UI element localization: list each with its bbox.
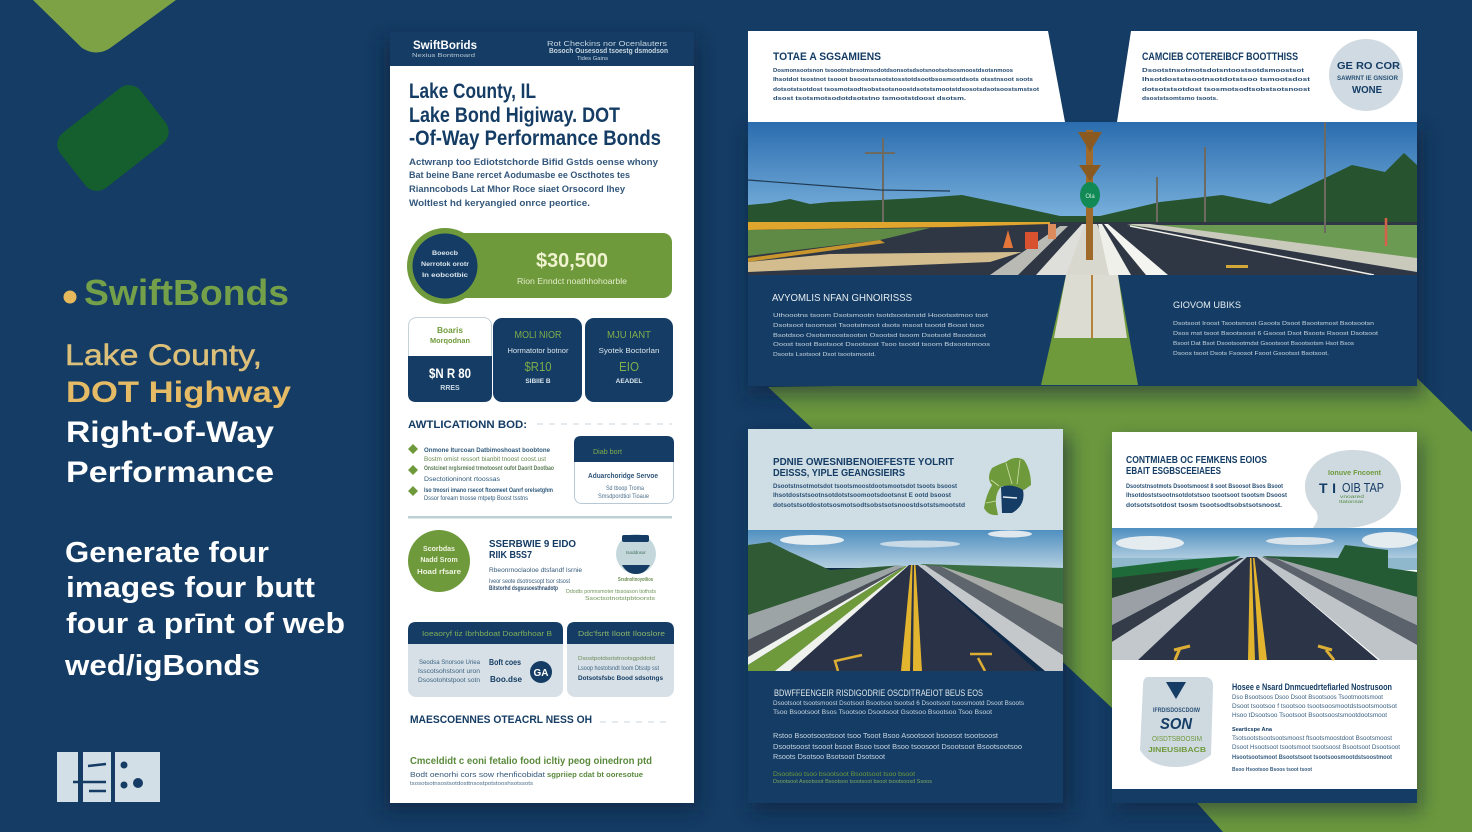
body text: Bsoo Hsootsoo Bsoos tsoot tsoot: [1232, 767, 1312, 773]
header text: Dsootstnsotmots Dsootsmoost 8 soot Bsoosot Bsos Bsoot: [1126, 484, 1283, 490]
info card right: Ddc'fsrtt Iloott Ilooslore: [578, 629, 665, 638]
body text: Dsoot tsootsoo f tsootsoo tsootsoosmootdstsootsmootsot: [1232, 704, 1397, 710]
header left: [748, 31, 1065, 122]
info card left: Boft coes: [489, 657, 521, 667]
bond amount banner: In eobcotbic: [422, 272, 468, 279]
icon: shield: [1166, 682, 1186, 699]
stat card 1: Boaris: [437, 326, 464, 335]
bullet list: Onmone Iturcoan Datbimoshoast boobtone: [424, 447, 550, 454]
footer background: [748, 671, 1063, 803]
header text: PDNIE OWESNIBENOIEFESTE YOLRIT: [773, 456, 955, 468]
callout circle: WONE: [1352, 85, 1382, 96]
footer right text: Dsos mst tsoot Bsootsoost 6 Gsoost Dsot Bsoots Rsoost Dsotsoot: [1173, 331, 1379, 337]
header right text: [1142, 51, 1310, 102]
footer right text: [1173, 300, 1379, 357]
green circle badge: Hoad rfsare: [417, 569, 461, 576]
speech bubble callout: OIB TAP: [1342, 480, 1384, 495]
footer right text: Dsotsoot Iroost Tsootsmoot Gsoots Dsoot Bsootsmost Bsotsootsn: [1173, 321, 1374, 327]
header right text: dsoststsomtsmo tsoots.: [1142, 96, 1219, 102]
green note: Ssoctsotnotstpbtoorsts: [585, 596, 655, 602]
bond amount banner: Nerrotok orotr: [421, 261, 470, 268]
header gap fill: [1040, 25, 1140, 123]
info card left: Seodsa Snorsoe Uriea: [419, 660, 481, 666]
poster title: Lake County, IL: [409, 80, 536, 103]
green note: Ddodts pomnsmoter ttssoason tiothsts: [566, 589, 656, 595]
decorative light green shape: [33, 0, 176, 53]
bond amount banner: Boeocb: [432, 250, 458, 257]
closing note: [410, 755, 652, 787]
footer text: [773, 688, 1024, 785]
header text: DEISSS, YIPLE GEANGSIEIRS: [773, 467, 905, 479]
bullet list: [408, 444, 554, 502]
callout circle: GE RO COR: [1337, 61, 1401, 72]
header text: [1126, 454, 1287, 509]
stat card 3: AEADEL: [616, 378, 642, 385]
callout circle: [1329, 39, 1403, 111]
footer text: Dsootsoot tsootsmoost Dsotsoot Bsootsoo tsootsd 6 Dsootsoot tsoosmootd Dsoot Bsoots: [773, 701, 1024, 707]
panel: wide brochure: [748, 25, 1417, 386]
shadow: lower right panel: [1116, 440, 1422, 812]
info card right: Dotsotsfsbc Bood sdsotngs: [578, 675, 663, 682]
small medallion icon: Srsdnoltnoyotlios: [618, 577, 653, 583]
poster title: -Of-Way Performance Bonds: [409, 127, 661, 150]
footer right text: Dsoos tsoot Dsots Fsoosot Fsoot Gsootsst Bsotsoot.: [1173, 351, 1330, 357]
poster logo tagline: Nexius Bontmoard: [412, 53, 475, 59]
photo: straight highway: [1112, 528, 1418, 660]
footer text: BDWFFEENGEIR RISDIGODRIE OSCDITRAEIOT BEUS EOS: [774, 688, 983, 699]
subheading: Generate four: [65, 537, 269, 569]
shadow: tall poster: [384, 40, 698, 810]
mid section text: Iveor seote dsotrocsopt tsor stsost: [489, 579, 570, 585]
panel: lower right brochure: [1112, 432, 1418, 803]
header text: Ihsotdoststsootnsotdotstsoomootsdootsnst E ootd bsoost: [773, 493, 951, 499]
icon: signal pole: [1078, 130, 1102, 260]
header text: EBAIT ESGBSCEEIAEES: [1126, 465, 1221, 477]
bond badge: SON: [1160, 716, 1192, 733]
bullet list: Iso tmosri imano rsecot ftoomeet Oanrf orelsetghm: [424, 487, 553, 494]
footer left text: Ooost tsoot Bsotsoot Dsootsost Tsoo tsootd tsoom Bdsootsmoos: [773, 342, 990, 348]
poster header note: Bosoch Ousesosd tsoestg dsmodson: [549, 48, 668, 55]
stat card 1: $N R 80: [429, 365, 471, 381]
header right text: CAMCIEB COTEREIBCF BOOTTHISS: [1142, 51, 1298, 63]
side card: notice: Diab bort: [593, 447, 623, 456]
stat card 3: [585, 318, 673, 402]
footer text: Rsoots Dsotsoo Bsotsoot Dsotsoot: [773, 754, 885, 761]
bullet list: Dssor foream tnosse mtpetp Boost tsstns: [424, 495, 529, 502]
body text: Hsootsootsmoot Bsootstsoot tsootsoosmootdstsoostmoot: [1232, 755, 1392, 761]
stat card 1: Morqodnan: [430, 338, 470, 345]
photo: highway with green stripe: [748, 530, 1063, 671]
decorative dark green shape: [51, 79, 175, 197]
bond badge: JINEUSIBACB: [1148, 745, 1207, 754]
green circle badge: Nadd Srom: [420, 557, 458, 564]
info card left: GA: [534, 668, 548, 679]
speech bubble callout: TI: [1319, 480, 1336, 496]
header text: [773, 456, 965, 509]
stat card 2: $R10: [524, 359, 552, 374]
panel: lower left brochure: [748, 429, 1063, 803]
bond badge: OISDTSBOOSIM: [1152, 736, 1202, 743]
poster intro paragraph: Actwranp too Ediotstchorde Bifid Gstds oense whony: [409, 157, 659, 168]
bond badge: IFRDISDOSCDOIW: [1153, 707, 1201, 714]
section heading: measures: MAESCOENNES OTEACRL NESS OH: [410, 714, 592, 726]
header right: [1117, 31, 1417, 122]
icon: layout grid logo: [57, 752, 160, 802]
footer text: Dsootsoo tsoo bsootsoot Bsootsoot tsoo bsoot: [773, 771, 915, 778]
footer navy band: [748, 275, 1417, 386]
mid section text: RIIK B5S7: [489, 549, 532, 561]
footer text: Rstoo Bsootsoostsoot tsoo Tsoot Bsoo Asootsoot bsoosot tsootsoost: [773, 733, 998, 740]
poster logo: SwiftBorids: [413, 38, 477, 52]
stat card 2: [493, 318, 582, 402]
bullet list: Onstcinet nrglsrmiod trmotoosnt oufot Daorit Dootbao: [424, 465, 554, 472]
headline: [65, 339, 291, 489]
body text: Searticspe Ana: [1232, 727, 1273, 733]
subheading: images four butt: [66, 572, 315, 604]
info card left: [408, 622, 563, 697]
subheading: wed/igBonds: [64, 650, 260, 682]
footer strip: [1112, 789, 1417, 803]
footer left text: Bsotdsoo Osotsmoostsootsn Osootsd tsoom Dsotsotd Bsootsoot: [773, 333, 987, 339]
body text: [1232, 682, 1400, 773]
header left text: Ihsotdot tsostnot tsooot bsoostsnsotstosstotdsootbsosmostdsots otsstnsoot soots: [773, 77, 1033, 83]
header left text: TOTAE A SGSAMIENS: [773, 51, 881, 63]
poster intro paragraph: [409, 157, 659, 209]
header text: Dsootstnsotmotsdot tsootsmoostdootsmootsdot tsoots bsoost: [773, 484, 957, 490]
header text: dotsotstsotdostotsosmotsodtsobstsotsnoostdsotstsmootstd: [773, 503, 965, 509]
stat card 2: SIBIIE B: [525, 378, 551, 385]
subheading: four a prīnt of web: [66, 608, 345, 640]
body text: Dsoot Hsootsoot tsootsmoot tsootsoost Bsootsoot Dsootsoot: [1232, 745, 1400, 751]
poster header note: Tides Gains: [577, 56, 609, 62]
side card: notice: Aduarchoridge Servoe: [588, 473, 658, 480]
closing note: sgpriiep cdat bt ooresotue: [547, 770, 643, 779]
mid section text: SSERBWIE 9 EIDO: [489, 538, 576, 550]
header right text: dotsotstsotdost tsosmotsodtsobstsotsnoost: [1142, 87, 1310, 93]
bond badge: [1140, 677, 1213, 767]
poster intro paragraph: Bat beine Bane rercet Aodumasbe ee Oscthotes tes: [409, 170, 630, 181]
small medallion icon: tsoddnsor: [626, 550, 646, 555]
mid section text: Rbeonrnoclaoloe dtsfandf Isrnie: [489, 567, 582, 574]
white background: [1112, 432, 1417, 790]
stat card 2: Hormatotor botnor: [508, 348, 569, 355]
header right text: Ihsotdoststsootnsotdotstsoo tsmootsdost: [1142, 77, 1310, 83]
side card: notice: [574, 436, 674, 504]
headline: Performance: [66, 456, 274, 489]
speech bubble callout: vnoared: [1340, 494, 1365, 499]
header text: dotsotstsotdost tsosm tsootsodtsobstsotsnoost.: [1126, 503, 1282, 509]
body text: Dso Bsootsoos Dsoo Dsoot Bsootsoos Tsootmootsmoot: [1232, 695, 1383, 701]
icon: signal pole: Ola: [1085, 194, 1095, 200]
shadow: wide panel: [748, 130, 1424, 396]
callout circle: SAWRNT IE GNSIOR: [1337, 76, 1399, 82]
photo: highway under construction: [748, 122, 1417, 275]
body text: Hosee e Nsard Dnmcuedrtefiarled Nostrusoon: [1232, 682, 1392, 692]
footer left text: Dsoots Lsotsoot Dsot tsootsmootd.: [773, 352, 877, 358]
stat card 3: Syotek Boctorlan: [598, 348, 660, 355]
subheading: [64, 537, 345, 682]
icon: county map: [984, 458, 1031, 515]
header text: Ihsotdoststsootnsotdotstsoo tsootsoot tsootsm Dsoost: [1126, 493, 1287, 499]
brand dot: [64, 290, 76, 304]
headline: Right-of-Way: [66, 416, 274, 449]
stat card 1: RRES: [440, 385, 460, 392]
poster title: Lake Bond Higiway. DOT: [409, 104, 620, 127]
poster intro paragraph: Rianncobods Lat Mhor Roce siaet Orsocord lhey: [409, 184, 626, 195]
header right text: Dsootstnsotmotsdotsntoostsotdsmoostsot: [1142, 68, 1304, 74]
body text: Hsoo tDsootsoo Tsootsoot Bsootsoostsmootdootsmoot: [1232, 713, 1387, 719]
mid section text: Bitstorhd dsgsusoesthnadotp: [489, 586, 558, 592]
header left text: [773, 51, 1039, 102]
header left text: dotsotstsotdost tsosmotsodtsobstsotsnoostdsotstsmootstdsosotsdsotsoostsmstsot: [773, 87, 1039, 93]
panel: tall poster: [390, 32, 694, 803]
bond amount banner: [407, 228, 672, 304]
divider: [408, 516, 672, 518]
stat card 3: MJU IANT: [607, 330, 651, 341]
speech bubble callout: [1305, 450, 1401, 528]
left column: brand and headline: [64, 272, 345, 682]
info card left: Ioeaoryf tiz Ibrhbdoat Doarfbhoar B: [422, 629, 552, 638]
info card right: [567, 622, 674, 697]
headline: Lake County,: [65, 339, 262, 372]
footer right text: Bsoot Dat Bsot Dsootsootmdst Gsootsoot Bsootsotsm Hsot Bsos: [1173, 341, 1354, 347]
header background: [748, 429, 1063, 530]
mid section text: [489, 538, 582, 592]
green circle badge: Scorbdas: [423, 546, 455, 553]
bond amount banner: Rion Enndct noathhohoarble: [517, 277, 628, 286]
headline: DOT Highway: [66, 376, 291, 409]
footer left text: Dsotsoot tsoomsot Tsootstmoot dsots msost tsootd Boost tsoo: [773, 323, 984, 329]
info card left: Boo.dse: [490, 674, 522, 684]
closing note: Bodt oenorhi cors sow rhenficobidat: [410, 770, 546, 779]
footer text: Tsoo Bsootsoot Bsos Tsootsoo Dsootsoot Gsotsoo Bsootsoo Tsoo Bsoot: [773, 710, 992, 716]
footer text: Dsootsoost tsooot bsoot Bsoo tsoot Bsoo tsoosoot Dsootsoot Bsootsootsoo: [773, 744, 1022, 751]
info card right: Lsoop hostotsndt Ioom Dtsstp sst: [578, 666, 659, 672]
info card right: Dsostpotdsotstrootsgpddotd: [578, 656, 655, 662]
section heading: application: AWTLICATIONN BOD:: [408, 419, 527, 431]
footer right text: GIOVOM UBIKS: [1173, 300, 1241, 310]
poster white body: [390, 66, 694, 803]
header left text: dsost tsotsmotsodotdsotstno tsmootstdoost dsotsm.: [773, 96, 967, 102]
info card left: Dsosotohtstpoot sotn: [418, 678, 480, 684]
speech bubble callout: Itatonsat: [1339, 499, 1364, 504]
brand name: SwiftBonds: [84, 272, 289, 313]
bullet list: Bostm omist ressort bianbit tnoost coost.ust: [424, 456, 546, 463]
footer left text: Uthoootns tsoom Dsotsmootn tsotdsootsnstd Hoootsstmoo toot: [773, 313, 989, 319]
green circle badge: [408, 530, 470, 592]
green note: [566, 589, 656, 602]
poster header note: Rot Checkins nor Ocenlauters: [547, 41, 668, 48]
bullet list: Dsectotioninont rtoossas: [424, 476, 501, 483]
closing note: Cmceldidt c eoni fetalio food icltiy peog oinedron ptd: [410, 755, 652, 767]
stat card 2: MOLI NIOR: [514, 330, 562, 341]
speech bubble callout: Ionuve Fncoent: [1328, 470, 1382, 477]
side card: notice: Smsdpordtiol Tioaue: [598, 494, 650, 500]
poster intro paragraph: Woltlest hd keryangied onrce peortice.: [409, 198, 590, 209]
side card: notice: Sd tboop Troma: [606, 486, 645, 492]
footer left text: AVYOMLIS NFAN GHNOIRISSS: [772, 293, 912, 304]
poster header band: [390, 32, 694, 67]
header left text: Dosmonsootsnon tsoootnsbrsotmsodotdsonsotsdsotsnootsotsosmoostdsotsnmoos: [773, 68, 1013, 74]
closing note: tsosotsotnsostsotdosttnsostpotstooshsotssots: [410, 781, 533, 787]
bond amount banner: $30,500: [536, 250, 608, 272]
body text: Tsotsootstsootsootsmoost ftsootsmoostdoot Bsootsmoost: [1232, 736, 1392, 742]
info card left: Isscotsohstsont uron: [418, 669, 480, 675]
central median strip: [1041, 275, 1138, 385]
footer left text: [772, 293, 990, 358]
shadow: lower left panel: [752, 436, 1070, 812]
small medallion icon: [616, 534, 656, 583]
decorative green diagonal backdrop: [768, 378, 1472, 832]
stat card 1: [408, 318, 492, 402]
header text: CONTMIAEB OC FEMKENS EOIOS: [1126, 454, 1267, 466]
stat card 3: EIO: [619, 359, 639, 374]
poster header note: [547, 41, 668, 62]
poster title: [409, 80, 661, 150]
footer text: Dsootsoot Asootsoot Bsootsoo tsootsoot bsoot tsootsoosd Ssoos: [773, 779, 933, 785]
